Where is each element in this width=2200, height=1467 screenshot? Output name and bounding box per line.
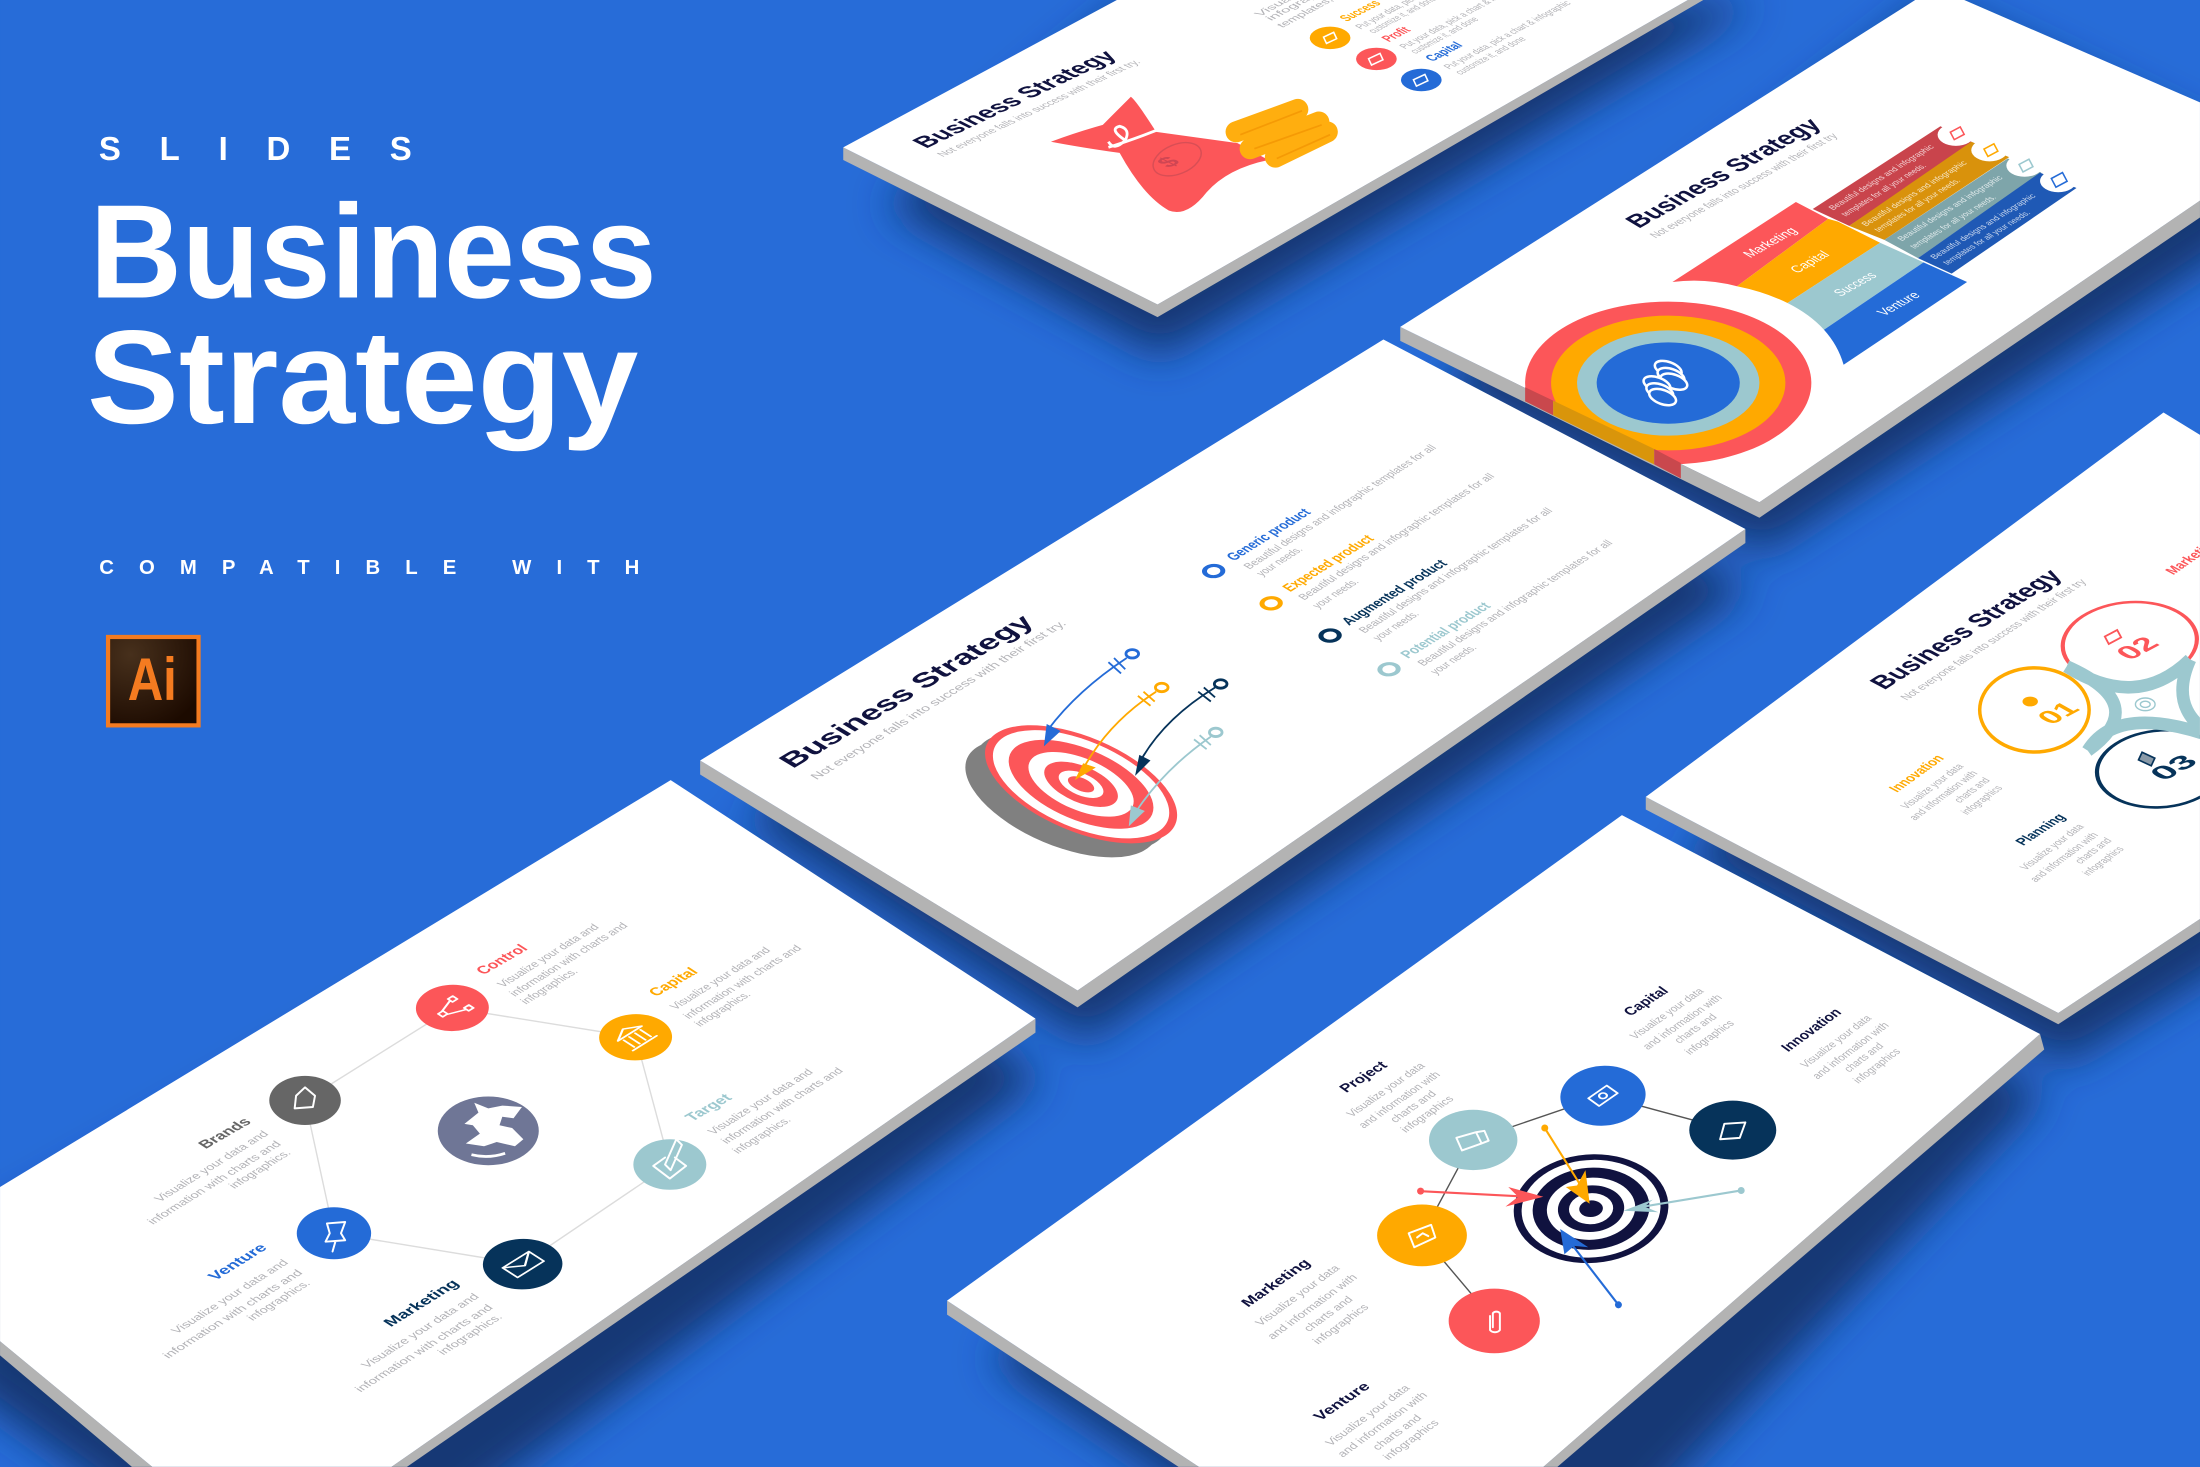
label: Planning: charts and — [2072, 836, 2115, 866]
list: Augmented product: Beautiful designs and infographic templates for all — [1356, 506, 1556, 635]
node: Marketing — [352, 1228, 579, 1394]
circle diagram: 03 — [2142, 750, 2200, 784]
list: Generic product: your needs. — [1254, 545, 1306, 578]
slide subtitle: Not everyone falls into success with their first try — [1897, 577, 2090, 702]
label: Marketing: infographics — [1310, 1302, 1372, 1346]
label: Marketing: and information with — [1265, 1272, 1360, 1342]
heading: Strategy: Strategy — [87, 303, 638, 452]
list: Augmented product: Augmented product — [1338, 557, 1451, 628]
arrow: yellow — [1541, 1125, 1590, 1204]
label: Innovation: charts and — [1841, 1041, 1886, 1074]
label: Planning: Visualize your data — [2017, 822, 2087, 872]
node: Brands: Visualize your data and — [152, 1129, 272, 1204]
node: Venture — [1449, 1289, 1540, 1353]
node: Control: infographics. — [518, 966, 581, 1006]
illustration: bullseye — [1482, 1132, 1700, 1286]
node: Venture: Venture — [205, 1241, 271, 1283]
circle diagram — [1978, 600, 2200, 809]
network connector lines — [305, 1008, 670, 1264]
label: Capital: Capital — [1620, 984, 1672, 1019]
heading: slides label: SLIDES — [99, 130, 412, 167]
label: Innovation: infographics — [1850, 1046, 1903, 1086]
list item: Success — [1310, 0, 1486, 49]
illustration: archery target — [949, 701, 1194, 882]
node: Capital: Capital — [645, 965, 702, 999]
label: Project: charts and — [1387, 1089, 1439, 1125]
ribbon descriptions: templates for all your needs. — [1908, 194, 1999, 251]
node: Venture — [159, 1207, 371, 1360]
illustration: money bag with coins: $ — [1151, 153, 1186, 171]
list: Generic product: Beautiful designs and infographic templates for all — [1241, 443, 1439, 571]
node: Capital — [584, 943, 805, 1070]
circle diagram: 02 — [2108, 632, 2166, 664]
label: Innovation: and information with — [1907, 769, 1981, 822]
slide title: Business Strategy — [1619, 114, 1827, 232]
label: Planning: infographics — [2080, 845, 2127, 878]
label: Venture: Visualize your data — [1323, 1383, 1413, 1448]
ribbon descriptions: templates for all your needs. — [1839, 162, 1929, 218]
label: Innovation: Visualize your data — [1798, 1013, 1875, 1070]
label: Project: Project — [1336, 1059, 1391, 1095]
node: Brands: information with charts and — [145, 1139, 284, 1226]
ring side strip on slide edge — [1525, 387, 1681, 478]
list: Potential product: Beautiful designs and infographic templates for all — [1415, 538, 1616, 668]
node: Marketing: Marketing — [380, 1277, 463, 1329]
node: Control — [401, 921, 631, 1041]
slide subtitle: Not everyone falls into success with their first try. — [807, 618, 1070, 782]
node: Capital: Visualize your data and — [667, 945, 773, 1012]
list: Generic product — [1201, 443, 1439, 579]
slide subtitle: Not everyone falls into success with their first try. — [934, 58, 1144, 158]
slide title: Business Strategy — [1863, 565, 2069, 693]
node: Target: Target — [682, 1092, 736, 1124]
label: Project: and information with — [1356, 1069, 1443, 1130]
panel: center target slide — [700, 340, 1745, 1007]
node: Marketing: information with charts and — [352, 1302, 496, 1394]
panel: ring and ribbons slide — [1400, 0, 2200, 518]
label: Marketing: Visualize your data — [1253, 1263, 1343, 1328]
node: Capital — [1543, 1053, 1663, 1138]
label: Marketing: charts and — [1301, 1294, 1356, 1334]
label: Venture: and information with — [1335, 1390, 1430, 1459]
list: Potential product: your needs. — [1428, 643, 1480, 676]
list item: Profit: Profit — [1379, 25, 1415, 44]
node: Control: Visualize your data and — [495, 922, 602, 989]
label: Venture: infographics — [1380, 1418, 1442, 1462]
arrow: navy — [1135, 680, 1227, 776]
label: Marketing — [1238, 1256, 1372, 1346]
slide title: Business Strategy — [906, 47, 1123, 151]
ribbon end caps with icons — [1938, 123, 2077, 192]
list item: Capital — [1401, 0, 1574, 91]
label: Innovation: Innovation — [1778, 1006, 1845, 1055]
panel: money bag slide — [843, 0, 1703, 317]
list: Generic product: Generic product — [1223, 506, 1315, 563]
node: Venture: Visualize your data and — [168, 1257, 291, 1336]
node: Capital: infographics. — [692, 990, 754, 1029]
node: Marketing — [1377, 1204, 1467, 1266]
list: Potential product — [1376, 538, 1616, 677]
slide subtitle: Not everyone falls into success with their first try — [1647, 131, 1841, 240]
icon: globe — [438, 1096, 539, 1165]
icon: Adobe Illustrator: Ai — [128, 645, 177, 713]
list item: Profit — [1356, 0, 1530, 70]
node: Target: Visualize your data and — [705, 1067, 816, 1137]
node: Target — [633, 1066, 846, 1190]
connector lines — [1422, 1096, 1733, 1321]
node: Control: Control — [473, 942, 532, 977]
illustration: money bag with coins — [1051, 97, 1330, 212]
ribbon bands: labelled tabs — [1672, 202, 1967, 365]
label: Planning: Planning — [2012, 811, 2070, 848]
label: Capital: and information with — [1640, 993, 1725, 1052]
node: Target: infographics. — [730, 1115, 794, 1156]
list: Expected product: your needs. — [1310, 577, 1362, 610]
tab labels: Venture — [1874, 290, 1924, 318]
list: Augmented product: your needs. — [1370, 609, 1422, 643]
node: Brands: infographics. — [226, 1148, 294, 1191]
arrow: blue — [1560, 1229, 1622, 1308]
label: Capital: charts and — [1672, 1012, 1720, 1046]
node: Marketing: infographics. — [434, 1312, 505, 1357]
circle diagram: 01 — [2030, 698, 2086, 728]
ribbon descriptions: templates for all your needs. — [1872, 177, 1963, 234]
arrow: red — [1417, 1187, 1543, 1207]
ribbon bands: dark strips — [1813, 126, 2077, 274]
list: Expected product: Beautiful designs and infographic templates for all — [1296, 472, 1498, 602]
ribbon descriptions — [1827, 143, 2039, 267]
node: Venture: infographics. — [243, 1278, 313, 1323]
label: Venture: charts and — [1370, 1413, 1424, 1452]
tab labels: Success — [1831, 270, 1881, 299]
label: Planning: and information with — [2027, 831, 2101, 884]
node: Brands: Brands — [195, 1115, 255, 1151]
ribbon descriptions: Beautiful designs and infographic — [1895, 174, 2006, 243]
node: Marketing: Visualize your data and — [358, 1291, 482, 1370]
tab labels: Marketing — [1740, 225, 1801, 260]
label: Innovation: charts and — [1951, 776, 1993, 805]
arrow: teal — [1129, 728, 1222, 826]
icon: coins — [1641, 358, 1689, 408]
ribbon descriptions: templates for all your needs. — [1941, 209, 2033, 267]
node: Brands — [145, 1076, 341, 1226]
arrow: blue — [1044, 650, 1139, 746]
list item: Capital: customize it, and done — [1453, 35, 1529, 76]
node: Venture: information with charts and — [159, 1267, 306, 1360]
label: Capital: Visualize your data — [1627, 986, 1707, 1041]
label: Innovation: and information with — [1810, 1020, 1892, 1081]
text: compatible with: COMPATIBLE WITH — [99, 557, 639, 579]
node: Control: information with charts and — [507, 921, 631, 998]
node: Innovation — [1689, 1101, 1776, 1160]
node: Target: information with charts and — [719, 1066, 846, 1146]
list item: Capital: Capital — [1422, 40, 1467, 64]
label: Innovation — [1778, 1006, 1903, 1086]
list: Expected product — [1258, 472, 1498, 611]
label: Project: infographics — [1398, 1094, 1457, 1135]
label: Venture: Venture — [1310, 1380, 1374, 1424]
list: Expected product: Expected product — [1279, 533, 1378, 594]
list: Potential product: Potential product — [1397, 600, 1495, 661]
ribbon descriptions: Beautiful designs and infographic — [1928, 192, 2039, 261]
tab labels — [1740, 225, 1924, 318]
label: Capital: infographics — [1682, 1018, 1737, 1057]
label: Innovation: infographics — [1958, 784, 2006, 817]
panel: left hexagon network slide — [0, 780, 1035, 1467]
heading: Business: Business — [90, 177, 657, 326]
label: Project: Visualize your data — [1344, 1060, 1428, 1119]
panel: bottom target network slide — [947, 815, 2044, 1467]
label: Innovation: Innovation — [1886, 753, 1948, 795]
tab labels: Capital — [1787, 249, 1834, 276]
panel: right overlapping circles slide — [1646, 412, 2200, 1024]
concentric rings — [1525, 302, 1811, 464]
slide title: Business Strategy — [772, 610, 1041, 772]
node: Capital: information with charts and — [681, 943, 805, 1021]
arrow: yellow — [1075, 683, 1168, 780]
ribbon descriptions: Beautiful designs and infographic — [1859, 159, 1970, 228]
label: Innovation: Visualize your data — [1898, 762, 1967, 811]
arrow: teal — [1623, 1187, 1745, 1212]
label: Venture — [1310, 1380, 1442, 1462]
label: Marketing: Marketing — [1238, 1256, 1314, 1310]
icon: Adobe Illustrator — [108, 637, 199, 725]
ribbon descriptions: Beautiful designs and infographic — [1827, 143, 1937, 212]
node: Project — [1429, 1110, 1517, 1170]
list: Augmented product — [1317, 506, 1556, 644]
